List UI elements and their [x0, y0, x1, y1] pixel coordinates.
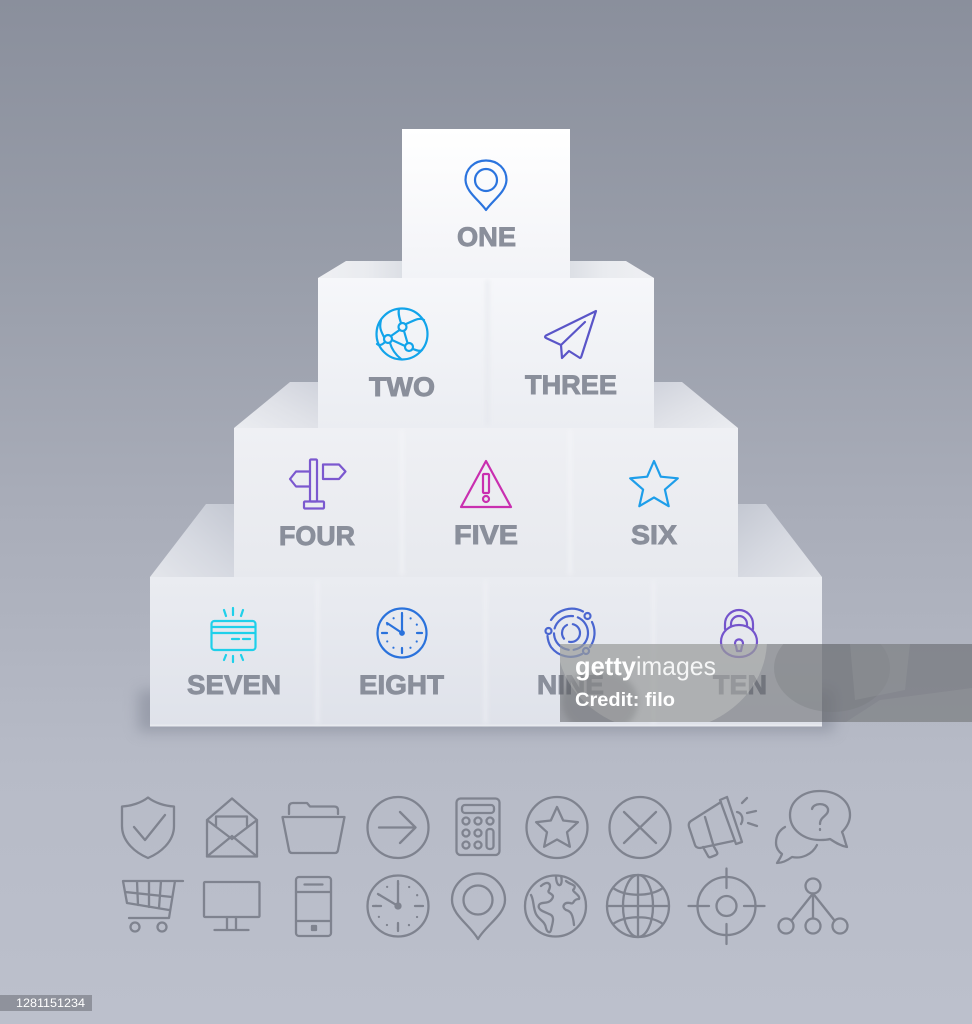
block five: warning triangle and label [454, 461, 518, 550]
row 4 blocks [150, 577, 822, 726]
top faces of steps [150, 261, 822, 577]
block one: location pin and label: ONE [457, 222, 516, 252]
icon: cross circle [610, 797, 670, 858]
block three: paper plane and label: THREE [525, 370, 617, 400]
watermark logo text: getty [575, 651, 637, 681]
icon row two [123, 868, 848, 944]
icon: shield [122, 798, 174, 858]
watermark banner [560, 644, 972, 722]
block one: location pin and label [457, 160, 516, 252]
watermark logo text [575, 651, 716, 681]
block ten: padlock and label: TEN [713, 670, 767, 700]
pyramid of blocks [138, 129, 834, 732]
pyramid base shadow [138, 690, 834, 732]
block nine: orbit rings and label: NINE [537, 670, 604, 700]
image id tag: 1281151234 [16, 996, 85, 1010]
icon: question speech bubbles [776, 791, 850, 863]
block five: warning triangle and label: FIVE [454, 520, 518, 550]
icon: clock [368, 876, 428, 936]
top block [402, 129, 570, 278]
icon: map pin [452, 874, 505, 939]
block six: star and label: SIX [631, 520, 677, 550]
block eight: clock and label [359, 608, 445, 700]
block nine: orbit rings and label [537, 609, 604, 700]
row 2 blocks [318, 278, 654, 428]
row 3 blocks [234, 428, 738, 577]
watermark abstract shapes [560, 644, 822, 722]
block four: signpost and label [279, 460, 355, 551]
block ten: padlock and label [713, 610, 767, 700]
block two: network globe and label: TWO [369, 372, 435, 402]
icon: monitor [204, 882, 260, 930]
icon: megaphone [689, 797, 757, 857]
block two: network globe and label [369, 308, 435, 402]
block seven: credit card and label: SEVEN [187, 670, 281, 700]
icon: smartphone [296, 877, 331, 936]
icon: star circle [526, 797, 588, 858]
block seven: credit card and label [187, 608, 281, 700]
watermark logo text: images [636, 651, 716, 681]
icon: globe grid [607, 875, 669, 937]
image id tag [0, 995, 92, 1011]
icon row one [122, 791, 850, 863]
icon: folder [282, 803, 344, 853]
icon: shopping cart [123, 881, 183, 932]
block four: signpost and label: FOUR [279, 521, 355, 551]
block six: star and label [630, 461, 678, 550]
block three: paper plane and label [525, 311, 617, 400]
icon: envelope [207, 798, 257, 856]
icon: earth [525, 876, 586, 936]
icon: arrow circle [368, 797, 428, 858]
block eight: clock and label: EIGHT [359, 670, 445, 700]
watermark credit text: Credit: filo [575, 690, 675, 711]
icon: calculator [456, 798, 500, 855]
icon: node hierarchy [778, 878, 848, 934]
icon: target crosshair [688, 868, 764, 944]
